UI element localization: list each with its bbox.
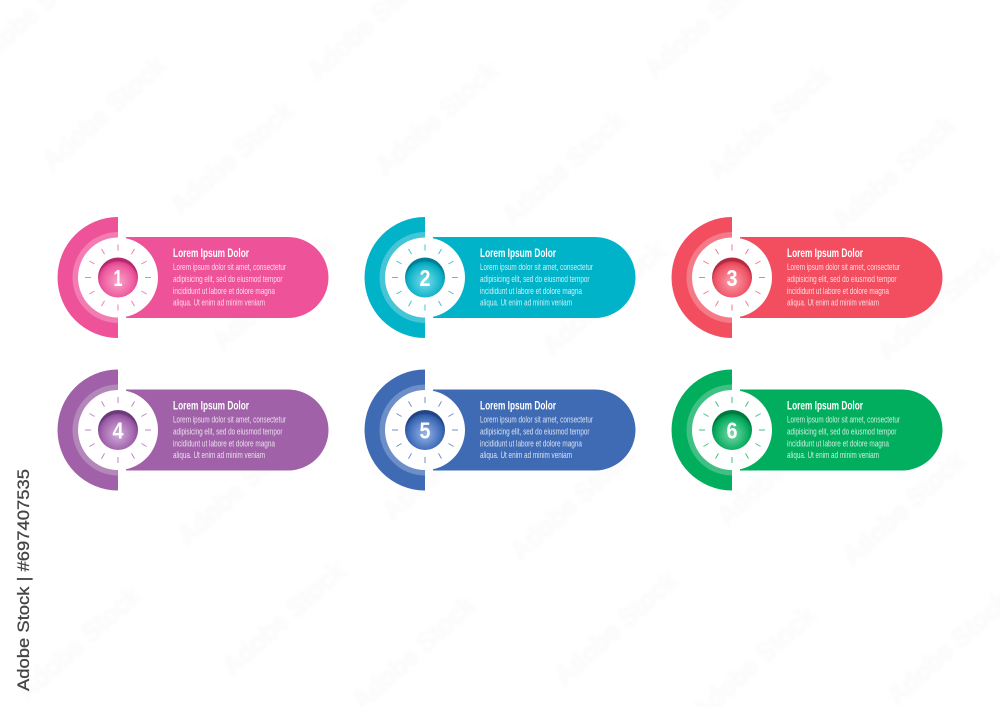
body text: incididunt ut labore et dolore magna <box>173 438 275 450</box>
watermark pattern: Adobe Stock <box>826 109 962 236</box>
watermark pattern: Adobe Stock <box>536 234 672 361</box>
watermark pattern: Adobe Stock <box>504 439 640 566</box>
number sphere <box>712 410 752 450</box>
body text: Lorem ipsum dolor sit amet, consectetur <box>173 262 286 273</box>
light ring <box>380 384 425 476</box>
body text: aliqua. Ut enim ad minim veniam <box>787 450 879 461</box>
light ring <box>72 232 118 323</box>
body text: Lorem ipsum dolor sit amet, consectetur <box>787 414 900 426</box>
dial ticks <box>699 397 765 463</box>
number: 1 <box>114 265 123 291</box>
watermark pattern: Adobe Stock <box>548 564 684 691</box>
outer half circle <box>672 370 732 490</box>
text pill <box>433 237 636 318</box>
text pill <box>126 237 328 318</box>
outer half circle <box>365 370 425 490</box>
body text: incididunt ut labore et dolore magna <box>787 438 889 450</box>
outer half circle <box>58 370 118 490</box>
text pill <box>740 237 942 318</box>
stock id side label: Adobe Stock | #697407535 <box>14 469 33 691</box>
heading: Lorem Ipsum Dolor <box>173 248 249 260</box>
watermark pattern: Adobe Stock <box>164 94 300 221</box>
body text: aliqua. Ut enim ad minim veniam <box>480 298 572 308</box>
white dial <box>692 238 772 318</box>
heading: Lorem Ipsum Dolor <box>787 400 863 412</box>
body text <box>787 262 900 308</box>
number: 5 <box>420 418 431 444</box>
watermark pattern: Adobe Stock <box>836 444 972 571</box>
heading: Lorem Ipsum Dolor <box>173 400 249 412</box>
watermark pattern: Adobe Stock <box>216 554 352 681</box>
watermark pattern: Adobe Stock <box>171 424 307 551</box>
dial ticks <box>85 244 151 310</box>
dial ticks <box>85 397 151 463</box>
light ring <box>72 384 118 476</box>
number: 4 <box>112 418 124 444</box>
panel: step 1 <box>58 217 329 338</box>
white dial <box>692 390 772 470</box>
watermark pattern: Adobe Stock <box>206 229 342 356</box>
number: 6 <box>726 418 738 444</box>
outer half circle <box>672 217 732 338</box>
text pill <box>433 390 636 470</box>
outer half circle <box>58 217 118 338</box>
body text: incididunt ut labore et dolore magna <box>787 286 889 297</box>
watermark pattern: Adobe Stock <box>496 104 632 231</box>
watermark pattern: Adobe Stock <box>369 54 505 181</box>
body text: Lorem ipsum dolor sit amet, consectetur <box>787 262 900 273</box>
body text <box>480 262 593 308</box>
watermark pattern: Adobe Stock <box>701 59 837 186</box>
body text: incididunt ut labore et dolore magna <box>480 438 582 450</box>
light ring <box>686 232 732 323</box>
dial ticks <box>392 397 458 463</box>
white dial <box>78 238 158 318</box>
white dial <box>385 390 465 470</box>
panel: step 2 <box>365 217 636 338</box>
light ring <box>686 384 732 476</box>
watermark pattern: Adobe Stock <box>376 399 512 526</box>
heading: Lorem Ipsum Dolor <box>480 400 556 412</box>
body text <box>480 414 593 461</box>
text pill <box>740 390 942 470</box>
body text: incididunt ut labore et dolore magna <box>173 286 275 297</box>
light ring <box>380 232 425 323</box>
body text <box>173 262 286 308</box>
number: 3 <box>726 265 738 291</box>
number sphere <box>405 410 445 450</box>
body text <box>173 414 286 461</box>
body text: adipisicing elit, sed do eiusmod tempor <box>173 426 282 438</box>
body text: aliqua. Ut enim ad minim veniam <box>173 298 265 308</box>
watermark pattern: Adobe Stock <box>36 49 172 176</box>
body text: aliqua. Ut enim ad minim veniam <box>480 450 572 461</box>
body text: adipisicing elit, sed do eiusmod tempor <box>787 426 896 438</box>
panel: step 4 <box>58 370 329 490</box>
heading: Lorem Ipsum Dolor <box>787 248 863 260</box>
heading: Lorem Ipsum Dolor <box>480 248 556 260</box>
body text: adipisicing elit, sed do eiusmod tempor <box>480 274 590 285</box>
white dial <box>385 238 465 318</box>
body text: Lorem ipsum dolor sit amet, consectetur <box>480 414 593 426</box>
number sphere <box>98 410 138 450</box>
dial ticks <box>392 244 458 310</box>
number: 2 <box>420 265 430 291</box>
panel: step 5 <box>365 370 636 490</box>
body text: adipisicing elit, sed do eiusmod tempor <box>480 426 590 438</box>
text pill <box>126 390 328 470</box>
body text <box>787 414 900 461</box>
panel: step 6 <box>672 370 942 490</box>
number sphere <box>405 258 445 298</box>
white dial <box>78 390 158 470</box>
number sphere <box>98 258 138 298</box>
body text: Lorem ipsum dolor sit amet, consectetur <box>480 262 593 273</box>
outer half circle <box>365 217 425 338</box>
body text: aliqua. Ut enim ad minim veniam <box>787 298 879 308</box>
body text: incididunt ut labore et dolore magna <box>480 286 582 297</box>
body text: adipisicing elit, sed do eiusmod tempor <box>787 274 896 285</box>
body text: aliqua. Ut enim ad minim veniam <box>173 450 265 461</box>
watermark pattern: Adobe Stock <box>711 404 847 531</box>
panel: step 3 <box>672 217 942 338</box>
number sphere <box>712 258 752 298</box>
body text: adipisicing elit, sed do eiusmod tempor <box>173 274 282 285</box>
watermark pattern: Adobe Stock <box>11 579 147 706</box>
dial ticks <box>699 244 765 310</box>
body text: Lorem ipsum dolor sit amet, consectetur <box>173 414 286 426</box>
